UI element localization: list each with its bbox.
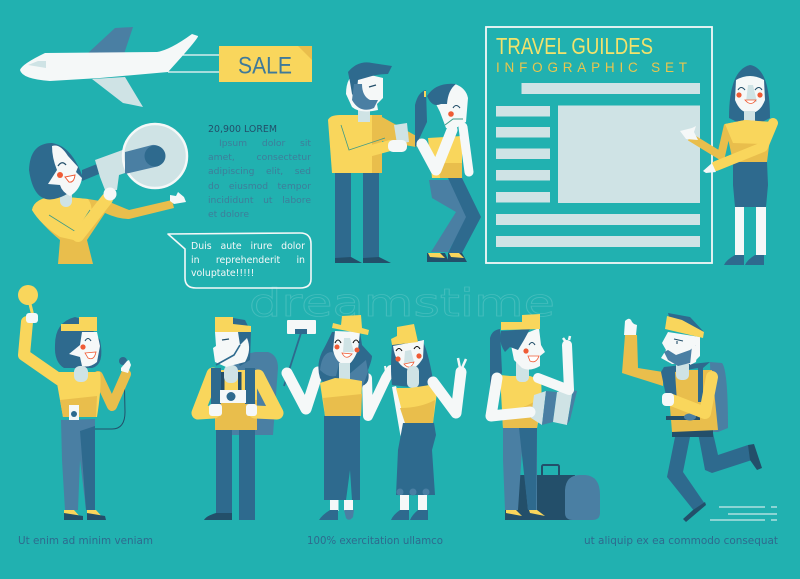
sale banner [219, 46, 312, 82]
airplane with sale banner [20, 27, 312, 107]
lorem paragraph [208, 138, 311, 220]
microphone [119, 357, 127, 365]
lorem paragraph: amet, consectetur [208, 152, 311, 163]
suitcase [515, 465, 600, 520]
caption: center: 100% exercitation ullamco [307, 535, 443, 547]
speech bubble text: voluptate!!!!! [191, 268, 254, 279]
camera [220, 390, 246, 403]
panel placeholder bars [496, 83, 700, 247]
watermark: dreamstime [249, 281, 555, 325]
speech bubble text: in reprehenderit in [191, 255, 305, 266]
badge [69, 405, 79, 420]
running man with backpack [622, 313, 777, 522]
surprised woman with ponytail [415, 84, 481, 262]
man with camera and backpack [198, 317, 278, 520]
lorem paragraph: incididunt ut labore [208, 195, 311, 206]
map [531, 388, 577, 425]
lorem paragraph: do eiusmod tempor [208, 181, 311, 192]
speech bubble text: Duis aute irure dolor [191, 241, 305, 252]
lorem heading: 20,900 LOREM [208, 124, 277, 135]
woman with lollipop sign and microphone [18, 285, 131, 520]
woman taking selfie [284, 315, 391, 520]
caption: right: ut aliquip ex ea commodo consequat [584, 535, 778, 547]
panel title: TRAVEL GUILDES [496, 33, 653, 59]
lorem paragraph: Ipsum dolor sit [219, 138, 311, 149]
woman with megaphone [29, 124, 187, 264]
speech bubble [168, 233, 311, 288]
caption: left: Ut enim ad minim veniam [18, 535, 153, 547]
lorem paragraph: et dolore [208, 209, 249, 220]
woman making peace sign [391, 324, 466, 520]
megaphone [78, 124, 187, 236]
speed lines [710, 507, 777, 520]
woman with map and suitcase [490, 314, 600, 520]
man with beard and phone [328, 62, 420, 263]
info panel [486, 27, 712, 263]
selfie stick [284, 320, 316, 386]
sale banner: SALE [238, 52, 292, 80]
panel subtitle: INFOGRAPHIC SET [496, 60, 687, 75]
speech bubble text [191, 241, 305, 279]
presenter woman [680, 65, 773, 265]
microphone cable [95, 364, 125, 429]
lorem paragraph: adipiscing elit, sed [208, 166, 311, 177]
